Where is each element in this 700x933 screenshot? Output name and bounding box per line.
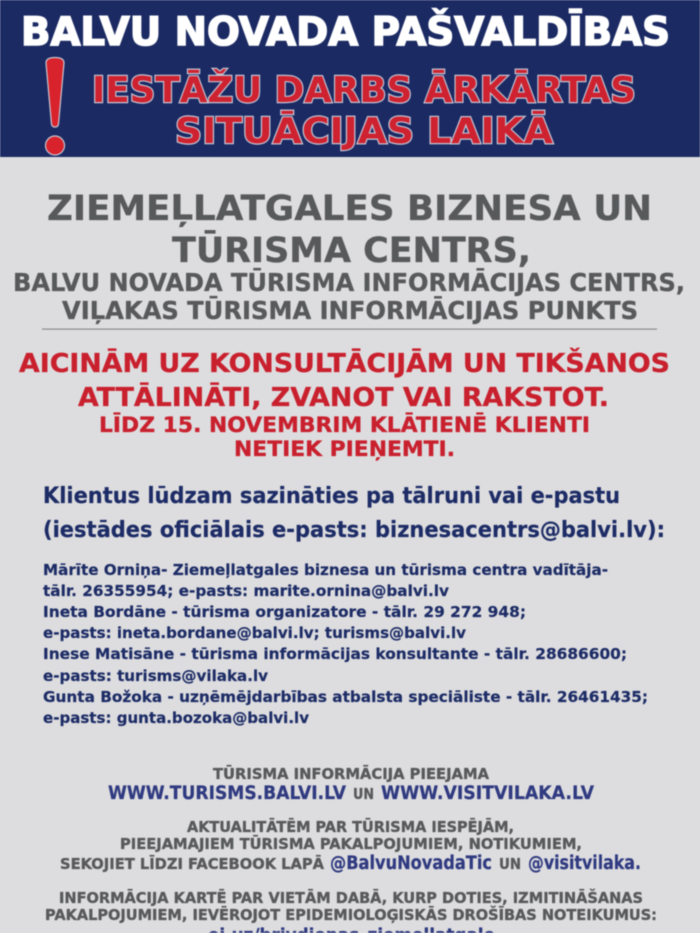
text block: contact request: (iestādes oficiālais e-pasts: biznesacentrs@balvi.lv): (43, 518, 665, 543)
text block: facebook pages: SEKOJIET LĪDZI FACEBOOK LAPĀ (60, 853, 324, 873)
heading: organisation names: VIĻAKAS TŪRISMA INFORMĀCIJAS PUNKTS (62, 295, 638, 325)
panel: header banner (0, 0, 700, 157)
text block: facebook pages: PIEEJAMAJIEM TŪRISMA PAKALPOJUMIEM, NOTIKUMIEM, (120, 833, 582, 853)
text block: red invitation notice: LĪDZ 15. NOVEMBRIM KLĀTIENĒ KLIENTI (99, 412, 590, 437)
text block: red invitation notice: AICINĀM UZ KONSULTĀCIJĀM UN TIKŠANOS (19, 347, 670, 379)
text block: map information: PAKALPOJUMIEM, IEVĒROJOT EPIDEMIOLOĢISKĀS DROŠĪBAS NOTEIKUMUS: (45, 904, 657, 924)
text block: staff contact list: e-pasts: turisms@vilaka.lv (43, 667, 268, 685)
text block: red invitation notice: ATTĀLINĀTI, ZVANOT VAI RAKSTOT. (78, 381, 609, 413)
heading: organisation names: TŪRISMA CENTRS, (172, 229, 531, 271)
text block: staff contact list (43, 561, 648, 727)
text block: red invitation notice: NETIEK PIEŅEMTI. (234, 437, 455, 461)
text block: facebook pages: @BalvuNovadaTic (330, 853, 492, 874)
text block: tourism websites: TŪRISMA INFORMĀCIJA PIEEJAMA (213, 763, 489, 783)
text block: tourism websites: WWW.VISITVILAKA.LV (381, 783, 595, 804)
heading: emergency subtitle: SITUĀCIJAS LAIKĀ (175, 110, 553, 152)
text block: staff contact list: Gunta Božoka - uzņēmējdarbības atbalsta speciāliste - tālr. 26461435; (43, 688, 648, 706)
text block: staff contact list: e-pasts: ineta.bordane@balvi.lv; turisms@balvi.lv (43, 624, 466, 642)
text block: facebook pages: UN (499, 855, 521, 873)
text block: contact request: Klientus lūdzam sazināties pa tālruni vai e-pastu (43, 484, 620, 509)
heading: organisation names: BALVU NOVADA TŪRISMA INFORMĀCIJAS CENTRS, (13, 267, 685, 297)
text block: map information (45, 887, 657, 933)
text block: tourism websites (108, 763, 595, 804)
text block: staff contact list: e-pasts: gunta.bozoka@balvi.lv (43, 709, 309, 727)
text block: staff contact list: tālr. 26355954; e-pasts: marite.ornina@balvi.lv (43, 582, 449, 600)
heading: organisation names: ZIEMEĻLATGALES BIZNESA UN (47, 189, 652, 229)
text block: facebook pages: AKTUALITĀTĒM PAR TŪRISMA IESPĒJĀM, (187, 816, 514, 836)
heading: organisation names (13, 189, 685, 325)
text block: red invitation notice (19, 347, 670, 461)
text block: staff contact list: Inese Matisāne - tūrisma informācijas konsultante - tālr. 28686600; (43, 645, 627, 663)
text block: tourism websites: WWW.TURISMS.BALVI.LV (108, 783, 347, 804)
text block: staff contact list: Ineta Bordāne - tūrisma organizatore - tālr. 29 272 948; (43, 603, 526, 621)
heading: emergency subtitle: IESTĀŽU DARBS ĀRKĀRTAS (92, 69, 636, 111)
text block: contact request (43, 484, 665, 543)
heading: municipality title: BALVU NOVADA PAŠVALDĪBAS (21, 8, 670, 55)
icon: red exclamation mark (46, 58, 64, 155)
text block: tourism websites: UN (353, 785, 374, 803)
heading: emergency subtitle (92, 69, 636, 152)
text block: facebook pages: @visitvilaka. (528, 853, 641, 874)
text block: facebook pages (60, 816, 641, 874)
text block: map information: INFORMĀCIJA KARTĒ PAR VIETĀM DABĀ, KURP DOTIES, IZMITINĀŠANAS (59, 887, 643, 907)
text block: staff contact list: Mārīte Orniņa- Ziemeļlatgales biznesa un tūrisma centra vadītāja- (43, 561, 608, 579)
